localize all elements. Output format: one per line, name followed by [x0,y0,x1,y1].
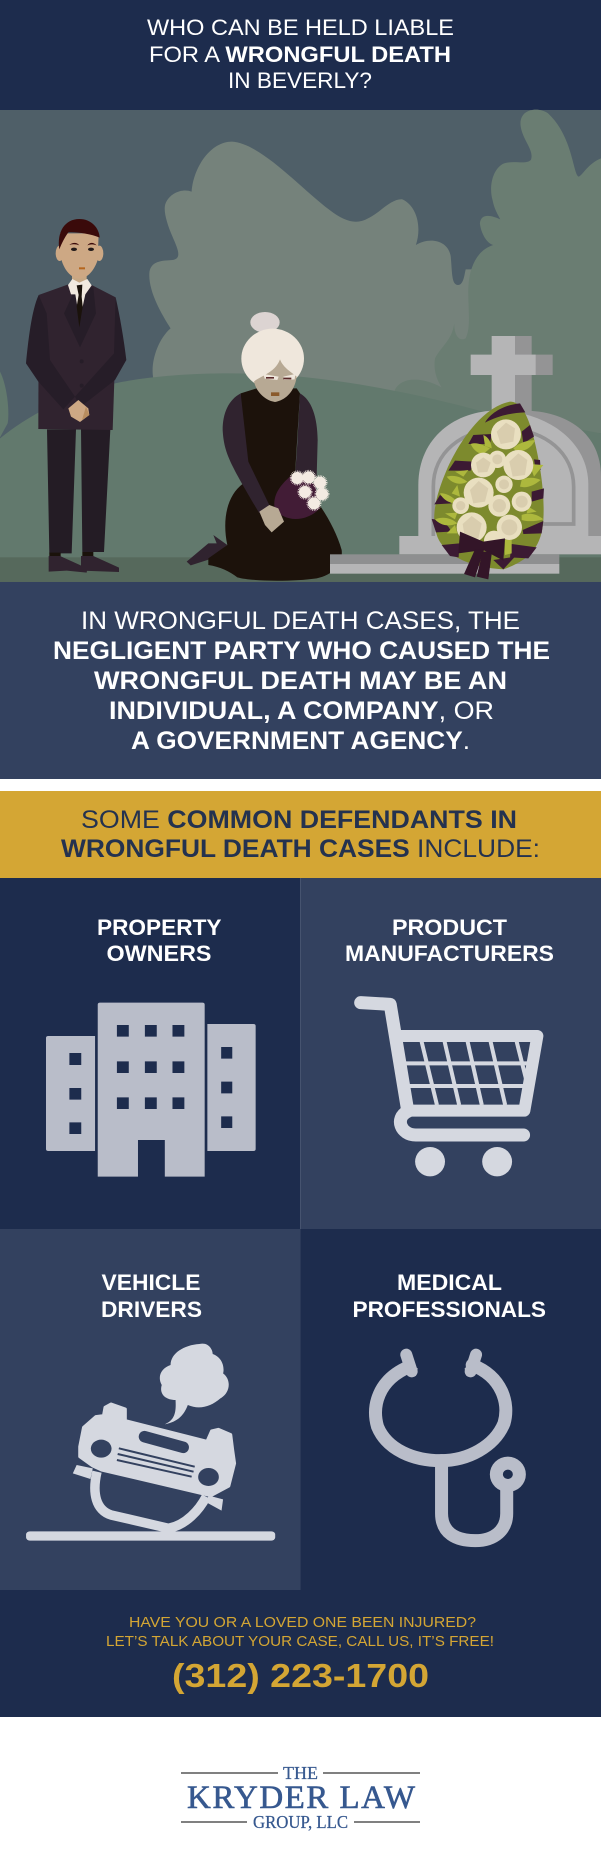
statement text: WRONGFUL DEATH MAY BE AN [94,667,507,695]
icon: office buildings [46,1003,256,1177]
title: FOR A WRONGFUL DEATH [149,42,451,67]
smoke cloud [160,1344,229,1424]
gravestone with cross [330,336,601,574]
panel: intro statement [0,582,601,779]
statement text: IN WRONGFUL DEATH CASES, THE [81,607,520,635]
label: OWNERS [106,941,212,966]
heading text: SOME COMMON DEFENDANTS IN [81,806,517,834]
logo: The Kryder Law Group, LLC: KRYDER LAW [187,1780,416,1816]
label: DRIVERS [101,1297,202,1322]
label: PROFESSIONALS [352,1297,546,1322]
label: VEHICLE [102,1270,200,1295]
label [97,915,222,966]
title: IN BEVERLY? [228,68,372,93]
call to action text: HAVE YOU OR A LOVED ONE BEEN INJURED? [129,1614,476,1631]
panel: funeral illustration [0,110,601,582]
heading text: WRONGFUL DEATH CASES INCLUDE: [61,835,540,863]
icon: stethoscope [376,1355,526,1541]
panel: product manufacturers [300,878,601,1229]
statement text: A GOVERNMENT AGENCY . [131,727,470,755]
label: PROPERTY [97,915,222,940]
roses [452,419,533,551]
heading text [61,806,540,863]
call to action text: LET’S TALK ABOUT YOUR CASE, CALL US, IT’S FREE! [106,1633,494,1650]
panel: defendants heading [0,791,601,878]
title [147,15,454,93]
label: MEDICAL [397,1270,502,1295]
statement text: NEGLIGENT PARTY WHO CAUSED THE [53,637,550,665]
kneeling woman [187,312,342,581]
statement text [53,607,550,755]
ribbon stripes [432,403,544,569]
label [101,1270,202,1322]
flower wreath [432,402,544,579]
label: MANUFACTURERS [345,941,554,966]
statement text: INDIVIDUAL, A COMPANY , OR [109,697,494,725]
trees and hill background [0,110,601,582]
panel: property owners [0,878,300,1229]
logo: The Kryder Law Group, LLC: THE [283,1763,318,1783]
logo: The Kryder Law Group, LLC: GROUP, LLC [253,1812,348,1832]
panel: medical professionals [300,1229,601,1590]
label [345,915,554,966]
icon: shopping cart [361,1003,537,1176]
man in black suit [26,219,126,573]
bow [458,532,505,579]
title: WHO CAN BE HELD LIABLE [147,15,454,40]
panel: vehicle drivers [0,1229,300,1590]
call to action text [106,1614,494,1650]
phone number: (312) 223-1700 [172,1657,429,1694]
label: PRODUCT [392,915,508,940]
panel: header [0,0,601,110]
logo: The Kryder Law Group, LLC [181,1763,420,1832]
label [352,1270,546,1322]
panel: call to action [0,1590,601,1717]
icon: overturned car [26,1344,275,1541]
leaves [435,435,543,555]
